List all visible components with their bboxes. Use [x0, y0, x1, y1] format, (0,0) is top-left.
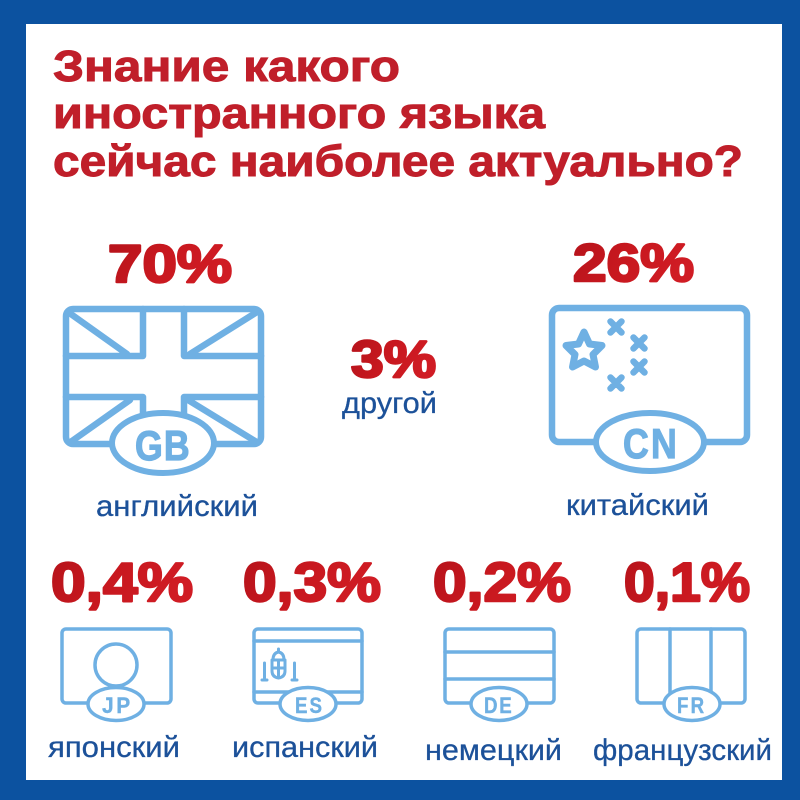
- stat: other 3%: 3%: [351, 331, 436, 389]
- icon: Germany flag: [445, 629, 554, 720]
- label: other: другой: [342, 387, 437, 420]
- icon: small stars: [610, 322, 644, 388]
- label: Spanish: испанский: [232, 731, 378, 764]
- title: [53, 43, 743, 186]
- title: Знание какого: [53, 43, 400, 91]
- icon: Spain flag: ES: [295, 695, 322, 718]
- icon: Japan flag: JP: [102, 694, 130, 718]
- stat: German 0,2%: 0,2%: [433, 551, 571, 613]
- icon: UK flag: [66, 309, 261, 473]
- icon: Germany flag: DE: [484, 695, 512, 718]
- icon: China flag: [552, 308, 747, 471]
- label: English: английский: [96, 490, 258, 523]
- icon: France flag: [637, 629, 745, 720]
- icon: UK flag: GB: [135, 423, 190, 470]
- label: Japanese: японский: [48, 731, 180, 764]
- title: сейчас наиболее актуально?: [53, 138, 743, 186]
- label: German: немецкий: [425, 734, 562, 767]
- stat: Spanish 0,3%: 0,3%: [243, 551, 381, 613]
- label: Chinese: китайский: [566, 489, 709, 522]
- icon: Spain flag: [254, 629, 362, 720]
- title: иностранного языка: [53, 90, 546, 138]
- icon: France flag: FR: [677, 695, 704, 718]
- stat: English 70%: 70%: [108, 235, 232, 294]
- label: French: французский: [593, 734, 772, 767]
- icon: large star: [566, 332, 602, 367]
- icon: China flag: CN: [623, 421, 677, 468]
- stat: Chinese 26%: 26%: [573, 234, 694, 293]
- stat: French 0,1%: 0,1%: [624, 551, 750, 613]
- icon: coat of arms: [262, 649, 297, 680]
- stat: Japanese 0,4%: 0,4%: [51, 551, 193, 613]
- icon: Japan flag: [62, 629, 171, 720]
